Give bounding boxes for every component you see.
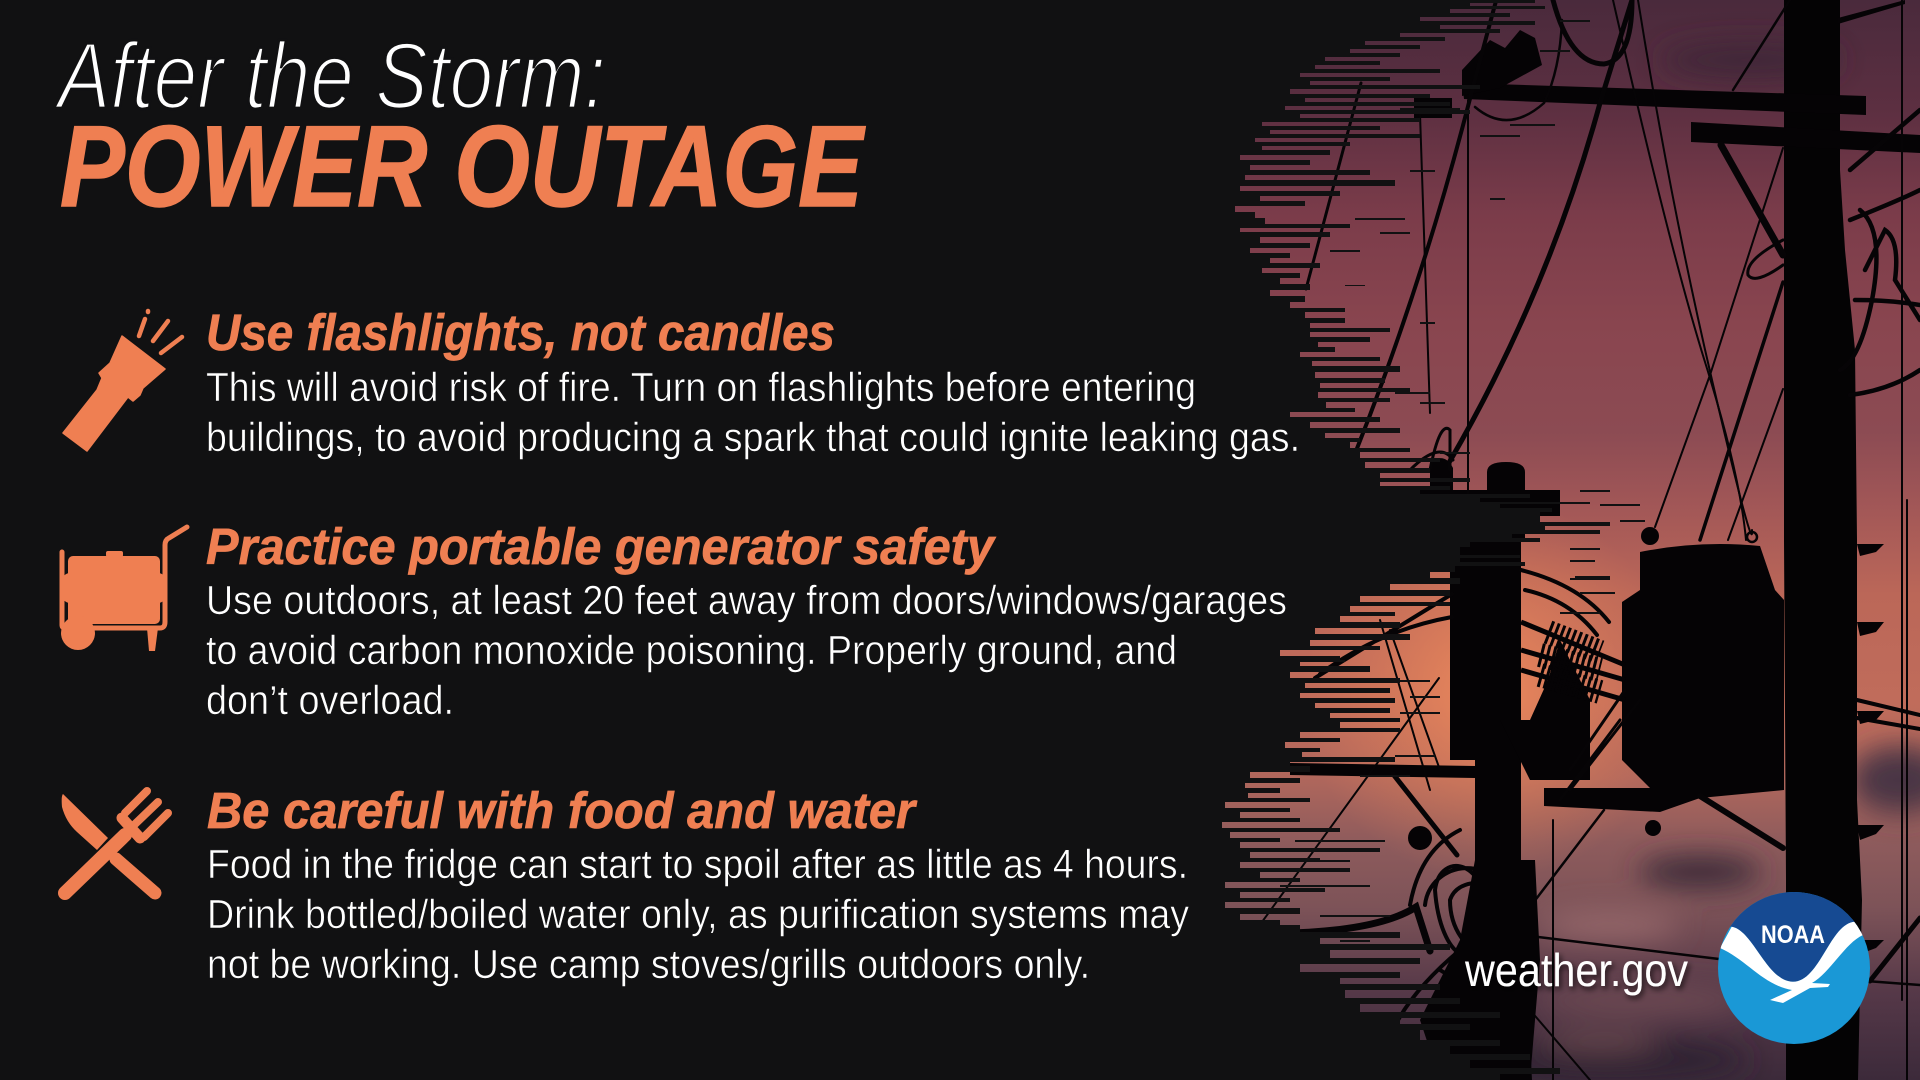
crossarms bbox=[1462, 0, 1920, 153]
main pole bbox=[1784, 0, 1862, 1080]
title line 1: After the Storm: After the Storm: bbox=[54, 23, 606, 128]
transformer bbox=[1544, 544, 1784, 812]
text: flashlights advice: This will avoid risk of fire. Turn on flashlights before entering bbox=[206, 364, 1196, 410]
icon: knife and fork bbox=[62, 791, 168, 893]
pole hardware bbox=[1857, 544, 1884, 954]
wires bbox=[1246, 0, 1920, 1080]
text: generator advice: don’t overload. bbox=[206, 677, 454, 723]
pole base tangle bbox=[1420, 860, 1540, 1080]
text: food and water advice: Food in the fridge can start to spoil after as little as 4 hours. bbox=[207, 841, 1188, 887]
text: generator advice bbox=[206, 577, 1287, 723]
text: flashlights advice bbox=[206, 364, 1300, 460]
weather.gov link text: weather.gov bbox=[1464, 944, 1688, 996]
logo: NOAA bbox=[1718, 892, 1870, 1044]
text: generator advice: to avoid carbon monoxide poisoning. Properly ground, and bbox=[206, 627, 1177, 673]
text: food and water advice bbox=[207, 841, 1189, 987]
section: generator bbox=[61, 518, 1287, 723]
icon: flashlight bbox=[63, 311, 182, 451]
heading: flashlights: Use flashlights, not candles bbox=[206, 304, 835, 361]
text: food and water advice: not be working. Use camp stoves/grills outdoors only. bbox=[207, 941, 1090, 987]
heading: food and water: Be careful with food and water bbox=[207, 782, 918, 839]
insulators bbox=[1521, 622, 1625, 700]
text: flashlights advice: buildings, to avoid producing a spark that could ignite leaking gas. bbox=[206, 414, 1300, 460]
heading: generator: Practice portable generator safety bbox=[206, 518, 997, 575]
title line 2: POWER OUTAGE: POWER OUTAGE bbox=[60, 103, 866, 231]
title bbox=[54, 23, 866, 231]
section: food and water bbox=[62, 782, 1189, 987]
icon: portable generator bbox=[61, 527, 187, 651]
second pole bbox=[1450, 462, 1532, 1080]
section: flashlights bbox=[63, 304, 1300, 460]
text: food and water advice: Drink bottled/boiled water only, as purification systems may bbox=[207, 891, 1189, 937]
left crossarm and hardware bbox=[1290, 30, 1590, 780]
text: generator advice: Use outdoors, at least 20 feet away from doors/windows/garages bbox=[206, 577, 1287, 623]
logo: NOAA: NOAA bbox=[1761, 921, 1825, 949]
photo: power lines at sunset bbox=[1150, 0, 1920, 1080]
